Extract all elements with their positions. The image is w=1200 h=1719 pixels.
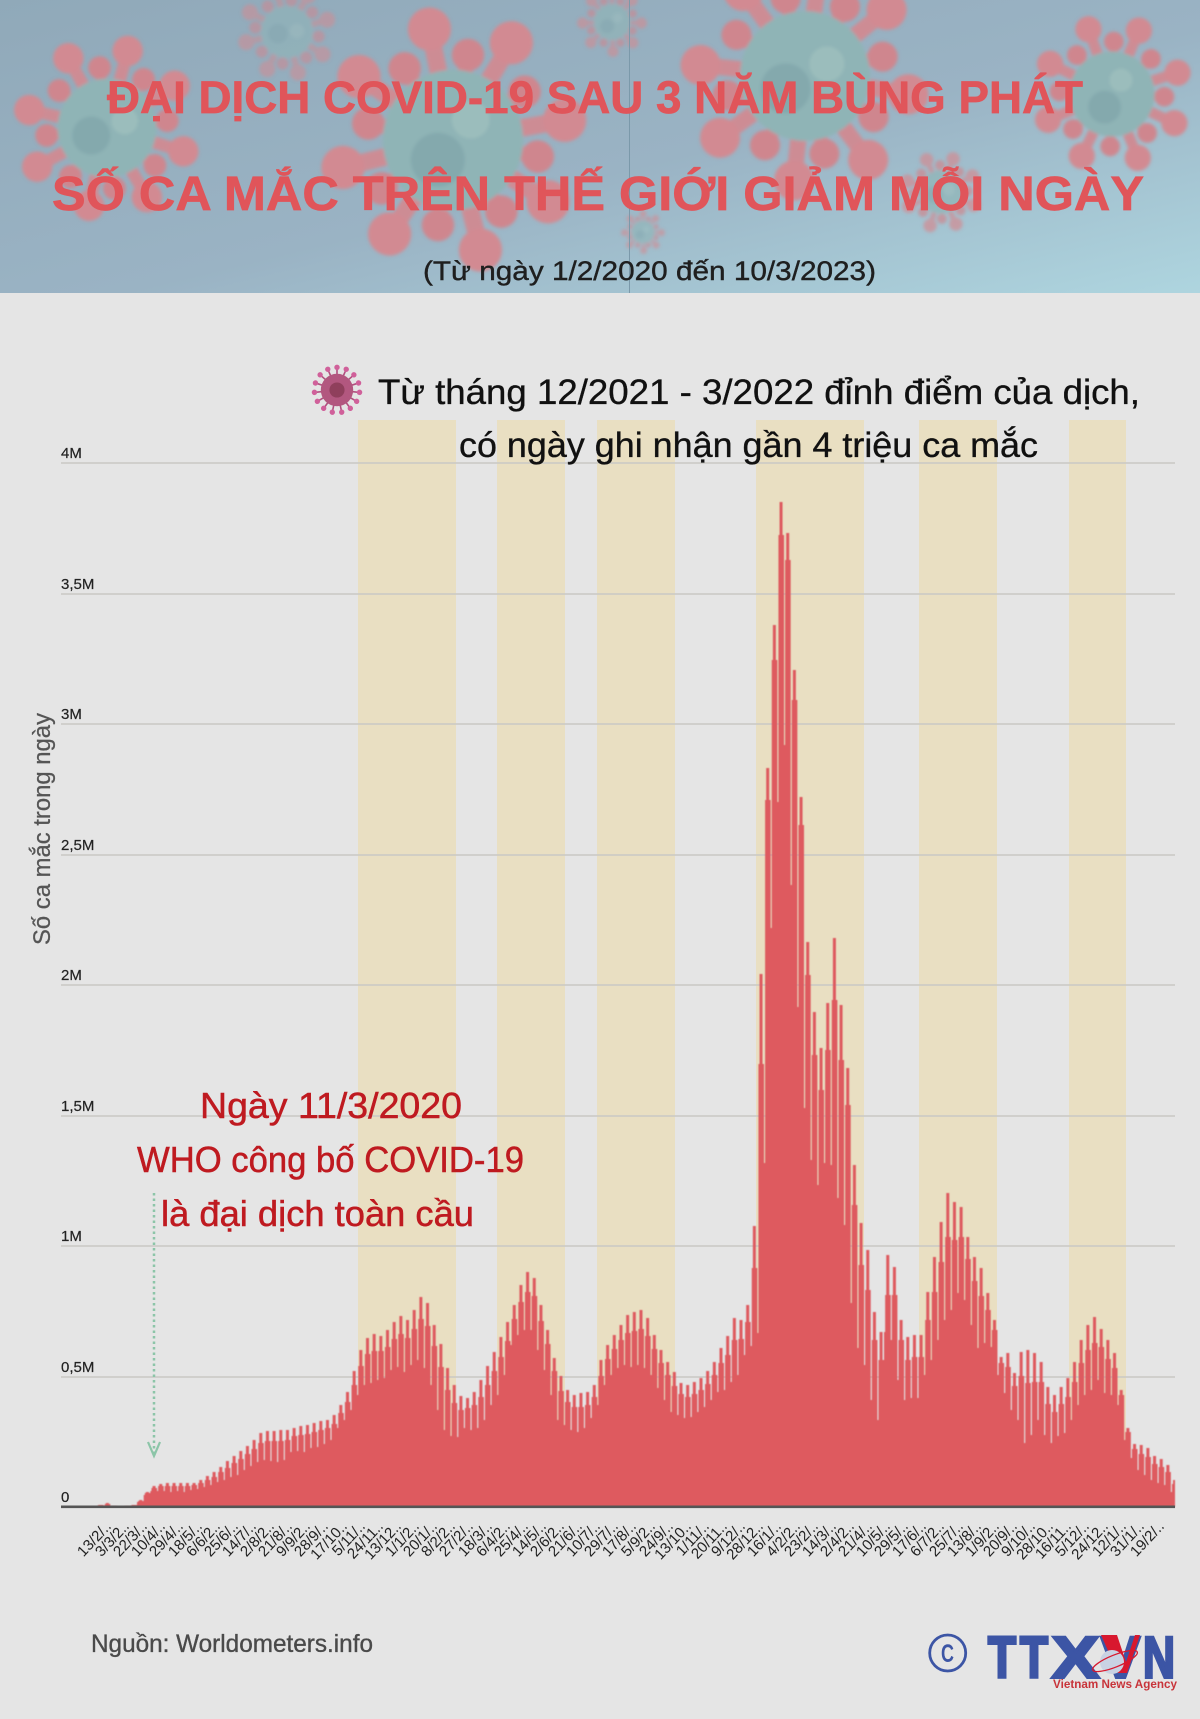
- x axis date labels: 8/2/2..: [418, 1518, 459, 1560]
- x axis date labels: 10/7/..: [563, 1518, 604, 1560]
- x axis date labels: 21/8/..: [255, 1518, 296, 1560]
- chart: [29, 420, 1175, 1563]
- x axis date labels: 1/9/2..: [962, 1518, 1003, 1560]
- annotation: WHO pandemic declaration: là đại dịch toàn cầu: [161, 1193, 474, 1234]
- x axis date labels: 31/1/..: [1107, 1518, 1148, 1560]
- x axis date labels: 25/6/..: [201, 1518, 242, 1560]
- x axis date labels: 24/11..: [344, 1518, 387, 1562]
- subtitle date range: (Từ ngày 1/2/2020 đến 10/3/2023): [423, 256, 876, 286]
- y axis title: Số ca mắc trong ngày: [29, 713, 56, 945]
- x axis date labels: 9/10/..: [998, 1518, 1039, 1560]
- x axis date labels: 13/2/..: [74, 1518, 115, 1560]
- y axis labels: [61, 445, 94, 1506]
- title line 1: ĐẠI DỊCH COVID-19 SAU 3 NĂM BÙNG PHÁT: [107, 72, 1083, 123]
- x axis date labels: 14/7/..: [219, 1518, 260, 1560]
- x axis date labels: 18/3/..: [455, 1518, 496, 1560]
- x axis date labels: 1/11/..: [673, 1518, 713, 1559]
- logo red V stroke and globe: [1090, 1635, 1140, 1676]
- logo wordmark: T: [1020, 1626, 1048, 1690]
- title line 2: SỐ CA MẮC TRÊN THẾ GIỚI GIẢM MỖI NGÀY: [52, 166, 1144, 221]
- y axis labels: 0: [61, 1489, 69, 1506]
- x axis date labels: 16/1/..: [744, 1518, 785, 1560]
- x axis date labels: 14/5/..: [509, 1518, 550, 1560]
- x axis date labels: 9/12/..: [708, 1518, 749, 1560]
- x axis date labels: 23/2/..: [781, 1518, 822, 1560]
- x axis date labels: 18/5/..: [165, 1518, 206, 1560]
- y axis labels: 3M: [61, 706, 82, 723]
- x axis date labels: 13/8/..: [944, 1518, 985, 1560]
- agency name: Vietnam News Agency: [1053, 1677, 1177, 1691]
- logo wordmark: T: [988, 1626, 1016, 1690]
- x axis date labels: 13/12..: [361, 1518, 405, 1563]
- x axis date labels: 10/5/..: [853, 1518, 894, 1560]
- x axis date labels: 13/10..: [651, 1518, 695, 1563]
- x axis date labels: 28/10..: [1013, 1518, 1057, 1563]
- x axis date labels: 1/1/2..: [382, 1518, 423, 1560]
- annotation: WHO pandemic declaration: Ngày 11/3/2020: [200, 1085, 462, 1126]
- highlighted wave period bands: [358, 420, 1126, 1507]
- x axis date labels: 21/4/..: [835, 1518, 876, 1560]
- callout: peak period: [311, 365, 1140, 465]
- x axis date labels: 3/3/2..: [92, 1518, 133, 1560]
- x axis date labels: 27/2/..: [436, 1518, 477, 1560]
- x axis date labels: 6/7/2..: [907, 1518, 948, 1560]
- annotation: WHO pandemic declaration: WHO công bố COVID-19: [137, 1139, 524, 1180]
- x axis date labels: 16/11..: [1032, 1518, 1075, 1562]
- x axis date labels: 5/9/2..: [618, 1518, 659, 1560]
- callout line 1: Từ tháng 12/2021 - 3/2022 đỉnh điểm của dịch,: [378, 373, 1140, 412]
- daily cases bars: [97, 502, 1175, 1507]
- x axis date labels: 22/3/..: [110, 1518, 151, 1560]
- x axis date labels: 20/9/..: [980, 1518, 1021, 1560]
- x axis date labels: 21/6/..: [545, 1518, 586, 1560]
- y axis labels: 2M: [61, 967, 82, 984]
- y axis labels: 4M: [61, 445, 82, 462]
- x axis date labels: 2/6/2..: [527, 1518, 568, 1560]
- source note: Nguồn: Worldometers.info: [91, 1630, 373, 1658]
- x axis date labels: 17/8/..: [599, 1518, 640, 1560]
- icon: copyright circle: C: [941, 1640, 954, 1668]
- x axis date labels: 12/1/..: [1089, 1518, 1130, 1560]
- icon: pink virus: [311, 365, 363, 415]
- x axis date labels: 14/3/..: [799, 1518, 840, 1560]
- annotation: WHO pandemic declaration: [137, 1085, 524, 1234]
- logo: TTXVN copyright mark: [930, 1626, 1177, 1691]
- x axis date labels: 17/6/..: [889, 1518, 930, 1560]
- x axis date labels: 29/7/..: [581, 1518, 622, 1560]
- x axis date labels: [74, 1518, 1168, 1563]
- callout line 2: có ngày ghi nhận gần 4 triệu ca mắc: [459, 426, 1038, 465]
- x axis date labels: 25/4/..: [491, 1518, 532, 1560]
- x axis date labels: 4/2/2..: [763, 1518, 804, 1560]
- x axis date labels: 10/4/..: [128, 1518, 169, 1560]
- x axis date labels: 24/9/..: [636, 1518, 677, 1560]
- logo wordmark: V: [1101, 1626, 1140, 1690]
- logo wordmark: N: [1143, 1626, 1175, 1690]
- x axis date labels: 5/12/..: [1052, 1518, 1093, 1560]
- x axis date labels: 29/5/..: [871, 1518, 912, 1560]
- x axis date labels: 28/12..: [723, 1518, 767, 1563]
- logo wordmark: [988, 1626, 1175, 1690]
- icon: copyright circle: [930, 1635, 966, 1671]
- x axis date labels: 2/4/2..: [817, 1518, 858, 1560]
- x axis date labels: 5/11/..: [329, 1518, 369, 1559]
- y axis labels: 1,5M: [61, 1098, 94, 1115]
- x axis date labels: 29/4/..: [146, 1518, 187, 1560]
- y axis labels: 3,5M: [61, 576, 94, 593]
- y axis labels: 0,5M: [61, 1359, 94, 1376]
- x axis date labels: 6/4/2..: [473, 1518, 514, 1560]
- x axis date labels: 2/8/2..: [237, 1518, 278, 1560]
- header banner: [0, 0, 1200, 301]
- x axis date labels: 19/2/..: [1127, 1518, 1168, 1560]
- x axis date labels: 6/6/2..: [183, 1518, 224, 1560]
- x axis date labels: 20/1/..: [400, 1518, 441, 1560]
- arrow: to 11/3/2020 on the axis: [148, 1193, 160, 1456]
- banner virus photo background: [0, 0, 1200, 301]
- x axis date labels: 17/10..: [307, 1518, 351, 1563]
- y axis labels: 2,5M: [61, 837, 94, 854]
- x axis date labels: 28/9/..: [291, 1518, 332, 1560]
- y axis labels: 1M: [61, 1228, 82, 1245]
- logo wordmark: X: [1052, 1626, 1099, 1690]
- x axis date labels: 20/11..: [688, 1518, 731, 1562]
- x axis date labels: 24/12..: [1068, 1518, 1112, 1563]
- x axis date labels: 25/7/..: [926, 1518, 967, 1560]
- x axis line: [61, 1506, 1175, 1508]
- x axis date labels: 9/9/2..: [273, 1518, 314, 1560]
